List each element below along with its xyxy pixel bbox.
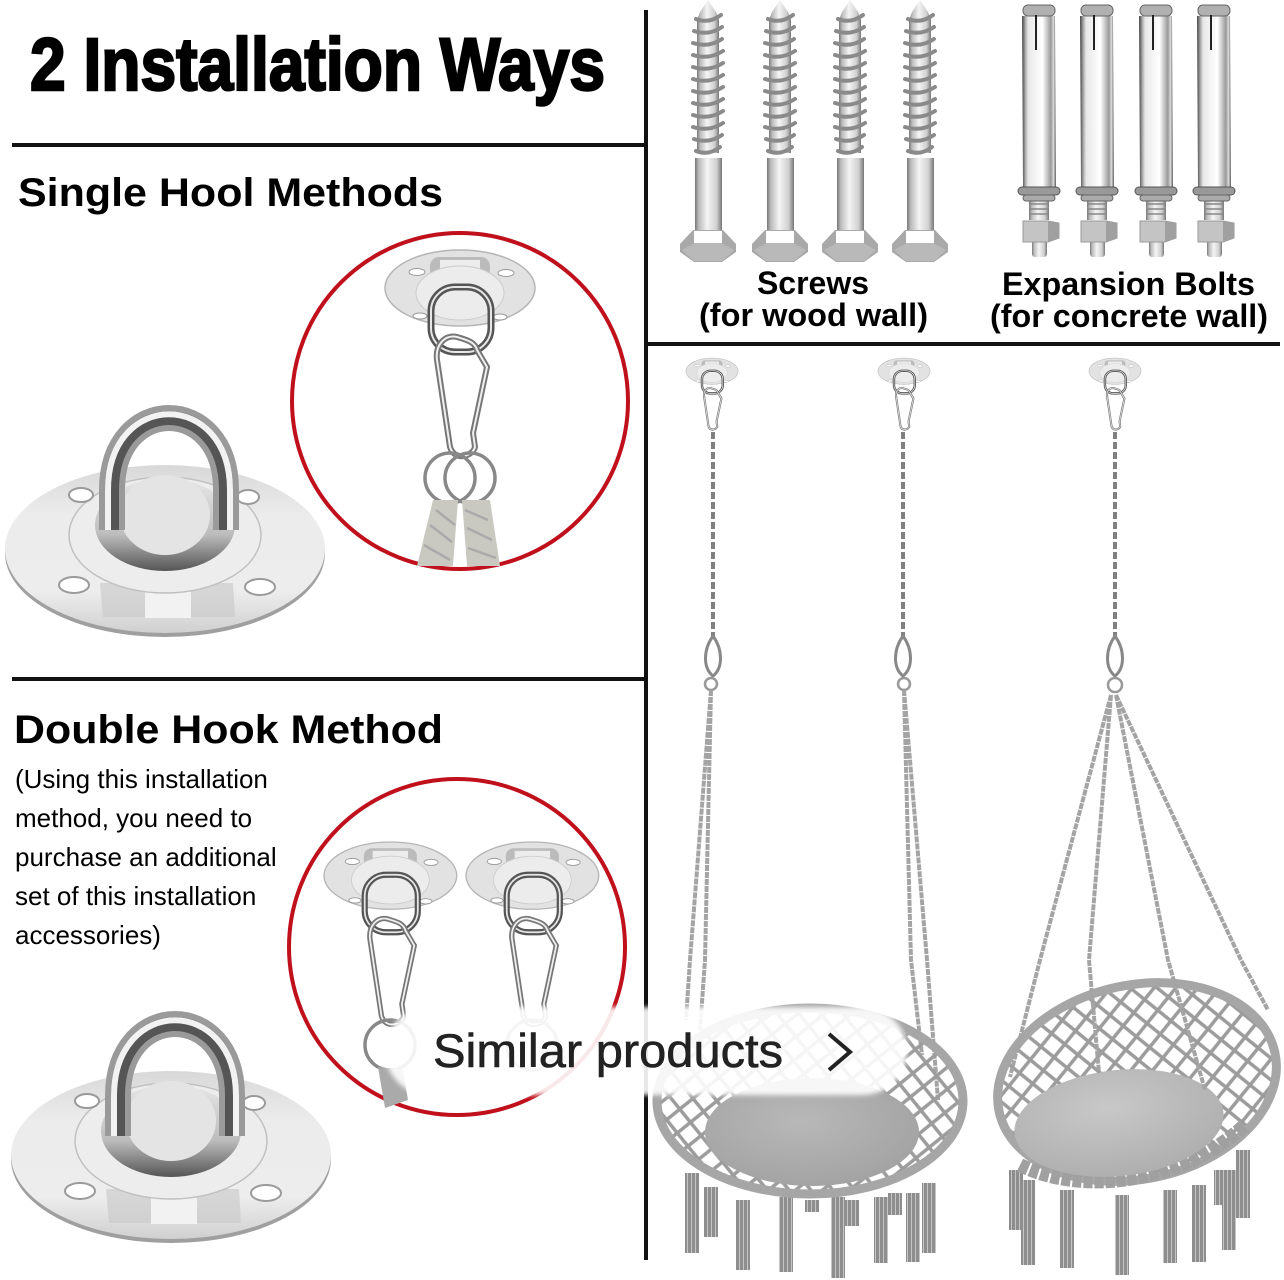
illustration: hanging chain and ropes, left (686, 358, 738, 1030)
text block: double hook note: (Using this installation (15, 764, 268, 794)
icon: pad eye plate, single (5, 414, 325, 637)
icon: pad eye plate, double (11, 1020, 331, 1243)
text block: double hook note: accessories) (15, 920, 161, 950)
label: screws: Screws (757, 265, 869, 301)
callout: single hook detail (292, 233, 628, 569)
text block: double hook note: method, you need to (15, 803, 252, 833)
callout: double hook detail (289, 779, 625, 1115)
icon: screws (680, 0, 948, 262)
heading: single hook: Single Hool Methods (18, 171, 443, 215)
label: expansion bolts: (for concrete wall) (990, 298, 1268, 334)
label: expansion bolts (990, 266, 1268, 334)
button: similar products (385, 1007, 907, 1095)
title: 2 Installation Ways (30, 23, 605, 106)
illustration: hanging chair, front view (657, 358, 963, 1278)
label: expansion bolts: Expansion Bolts (1002, 266, 1255, 302)
label: screws (699, 265, 928, 333)
heading: double hook: Double Hook Method (14, 708, 443, 752)
text block: double hook note: purchase an additional (15, 842, 277, 872)
icon: expansion bolts (1018, 5, 1235, 257)
button: similar products: Similar products (433, 1024, 783, 1077)
illustration: hanging chair, angled view (979, 358, 1284, 1275)
text block: double hook note: set of this installation (15, 881, 256, 911)
text block: double hook note (15, 764, 277, 950)
label: screws: (for wood wall) (699, 297, 928, 333)
